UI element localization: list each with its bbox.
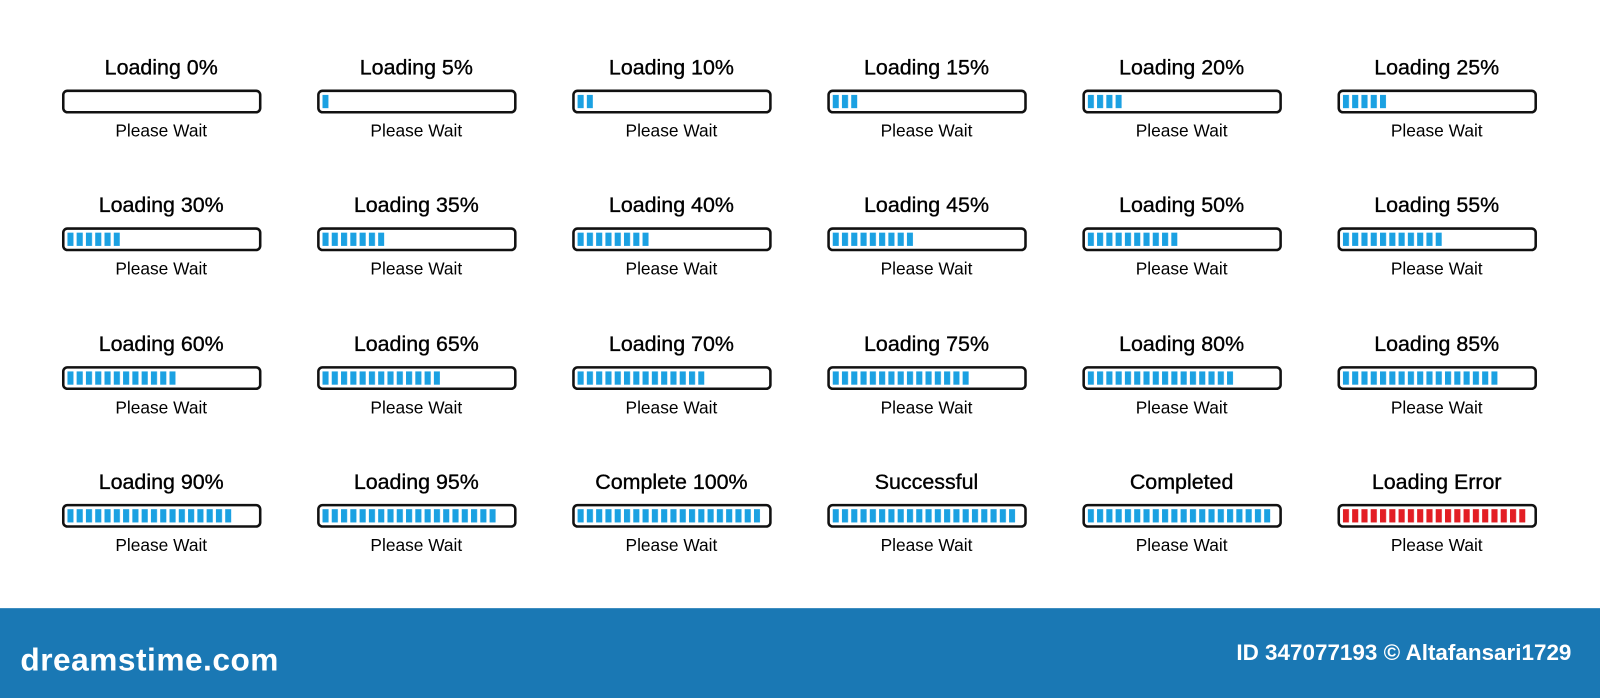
cell: Loading 10%: Please Wait — [626, 121, 718, 141]
cell: Loading 80% — [1084, 332, 1281, 417]
cell: Loading 50%: Loading 50% — [1119, 193, 1244, 217]
cell: Completed: Please Wait — [1136, 535, 1228, 555]
cell: Loading 5%: Loading 5% — [360, 55, 473, 79]
cell: Loading 95% — [318, 470, 515, 555]
cell: Loading 20%: Please Wait — [1136, 121, 1228, 141]
cell: Loading 75%: Loading 75% — [864, 332, 989, 356]
cell: Loading 75% — [829, 332, 1026, 417]
cell: Loading 40% — [573, 193, 770, 278]
cell: Loading 90%: Loading 90% — [99, 470, 224, 494]
cell: Loading 15% — [829, 55, 1026, 141]
cell: Loading 0% — [63, 55, 260, 141]
cell: Loading Error — [1339, 470, 1536, 555]
cell: Loading 60%: Please Wait — [115, 397, 207, 417]
cell: Loading 70%: Loading 70% — [609, 332, 734, 356]
cell: Loading 85%: Loading 85% — [1374, 332, 1499, 356]
cell: Loading 55% — [1339, 193, 1536, 278]
cell: Loading 0%: Loading 0% — [105, 55, 218, 79]
cell: Loading 30% — [63, 193, 260, 278]
row 2 — [63, 193, 1536, 278]
cell: Loading 40%: Loading 40% — [609, 193, 734, 217]
cell: Loading 45%: Please Wait — [881, 258, 973, 278]
cell: Loading 20% — [1084, 55, 1281, 141]
cell: Loading 15%: Please Wait — [881, 121, 973, 141]
cell: Loading 15%: Loading 15% — [864, 55, 989, 79]
cell: Loading Error: Please Wait — [1391, 535, 1483, 555]
cell: Loading 0%: Please Wait — [115, 121, 207, 141]
cell: Loading Error: Loading Error — [1372, 470, 1502, 494]
cell: Loading 40%: Please Wait — [626, 258, 718, 278]
cell: Loading 80%: Please Wait — [1136, 397, 1228, 417]
cell: Loading 25%: Please Wait — [1391, 121, 1483, 141]
footer id text: ID 347077193 © Altafansari1729 — [1236, 640, 1571, 665]
cell: Loading 60% — [63, 332, 260, 417]
cell: Loading 25%: Loading 25% — [1374, 55, 1499, 79]
cell: Loading 70%: Please Wait — [626, 397, 718, 417]
cell: Successful: Successful — [875, 470, 978, 494]
cell: Loading 55%: Loading 55% — [1374, 193, 1499, 217]
cell: Loading 65% — [318, 332, 515, 417]
row 1 — [63, 55, 1536, 141]
cell: Successful — [829, 470, 1026, 555]
cell: Loading 55%: Please Wait — [1391, 258, 1483, 278]
cell: Loading 70% — [573, 332, 770, 417]
cell: Loading 10% — [573, 55, 770, 141]
cell: Loading 20%: Loading 20% — [1119, 55, 1244, 79]
cell: Completed: Completed — [1130, 470, 1233, 494]
cell: Loading 80%: Loading 80% — [1119, 332, 1244, 356]
cell: Loading 35% — [318, 193, 515, 278]
cell: Complete 100%: Complete 100% — [595, 470, 748, 494]
cell: Loading 95%: Please Wait — [370, 535, 462, 555]
cell: Loading 45%: Loading 45% — [864, 193, 989, 217]
cell: Loading 85%: Please Wait — [1391, 397, 1483, 417]
footer band — [0, 608, 1600, 698]
row 4 — [63, 470, 1536, 555]
cell: Loading 35%: Loading 35% — [354, 193, 479, 217]
cell: Loading 65%: Please Wait — [370, 397, 462, 417]
cell: Loading 30%: Please Wait — [115, 258, 207, 278]
cell: Completed — [1084, 470, 1281, 555]
cell: Loading 5%: Please Wait — [370, 121, 462, 141]
cell: Loading 60%: Loading 60% — [99, 332, 224, 356]
cell: Loading 90%: Please Wait — [115, 535, 207, 555]
cell: Loading 35%: Please Wait — [370, 258, 462, 278]
cell: Complete 100%: Please Wait — [626, 535, 718, 555]
cell: Loading 30%: Loading 30% — [99, 193, 224, 217]
cell: Loading 5% — [318, 55, 515, 141]
cell: Successful: Please Wait — [881, 535, 973, 555]
cell: Loading 85% — [1339, 332, 1536, 417]
row 3 — [63, 332, 1536, 417]
footer logo text: dreamstime.com — [20, 641, 279, 677]
cell: Loading 25% — [1339, 55, 1536, 141]
cell: Loading 50%: Please Wait — [1136, 258, 1228, 278]
cell: Loading 95%: Loading 95% — [354, 470, 479, 494]
cell: Loading 10%: Loading 10% — [609, 55, 734, 79]
cell: Loading 45% — [829, 193, 1026, 278]
cell: Loading 90% — [63, 470, 260, 555]
cell: Loading 75%: Please Wait — [881, 397, 973, 417]
cell: Complete 100% — [573, 470, 770, 555]
cell: Loading 65%: Loading 65% — [354, 332, 479, 356]
cell: Loading 50% — [1084, 193, 1281, 278]
